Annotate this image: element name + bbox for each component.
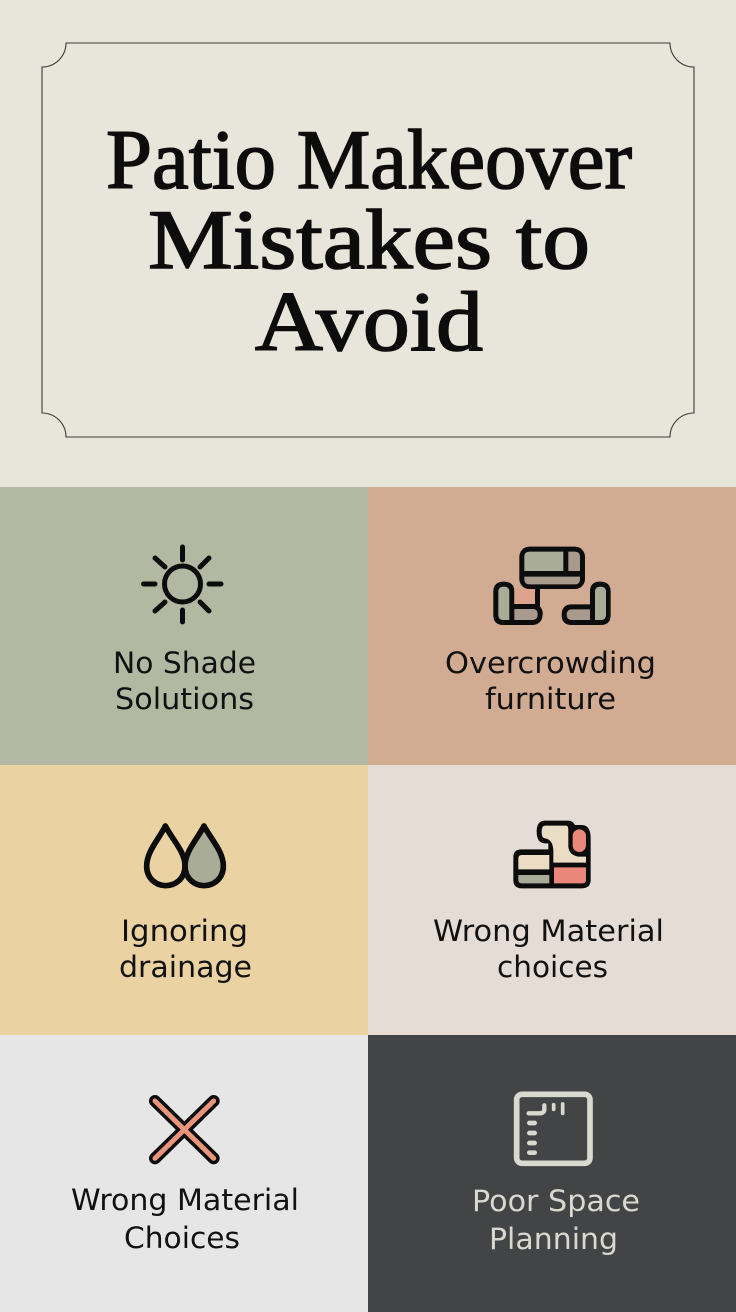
icon: cross	[155, 1101, 214, 1158]
label: poor space planning: Poor Space	[472, 1184, 640, 1218]
icon: material swatches	[513, 821, 591, 888]
label: overcrowding furniture: Overcrowding	[445, 646, 656, 680]
label: overcrowding furniture	[445, 646, 656, 716]
ornamental title frame	[42, 43, 694, 437]
title: Patio Makeover	[106, 113, 632, 207]
label: ignoring drainage: drainage	[119, 950, 252, 984]
label: ignoring drainage: Ignoring	[121, 914, 248, 948]
label: wrong material choices: Choices	[124, 1221, 240, 1255]
panel: wrong material choices x	[0, 1035, 368, 1312]
label: wrong material choices	[433, 914, 664, 984]
label: wrong material choices: Wrong Material	[433, 914, 664, 948]
label: no shade solutions	[113, 646, 256, 716]
panel: no shade solutions	[0, 487, 368, 765]
header panel	[0, 0, 736, 487]
icon: sun	[144, 547, 221, 622]
label: poor space planning: Planning	[489, 1222, 618, 1256]
icon: furniture	[493, 547, 611, 625]
label: no shade solutions: No Shade	[113, 646, 256, 680]
title: Avoid	[255, 275, 483, 369]
panel: wrong material choices	[368, 765, 736, 1035]
label: wrong material choices: Wrong Material	[71, 1183, 299, 1217]
panel: overcrowding furniture	[368, 487, 736, 765]
panel: poor space planning	[368, 1035, 736, 1312]
label: no shade solutions: Solutions	[115, 682, 254, 716]
label: poor space planning	[472, 1184, 640, 1256]
label: wrong material choices: choices	[497, 950, 608, 984]
icon: water drops	[147, 826, 223, 886]
icon: floor plan	[517, 1094, 590, 1163]
title	[106, 113, 632, 369]
panel: ignoring drainage	[0, 765, 368, 1035]
label: wrong material choices	[71, 1183, 299, 1255]
label: overcrowding furniture: furniture	[485, 682, 616, 716]
label: ignoring drainage	[119, 914, 252, 984]
title: Mistakes to	[148, 193, 590, 287]
